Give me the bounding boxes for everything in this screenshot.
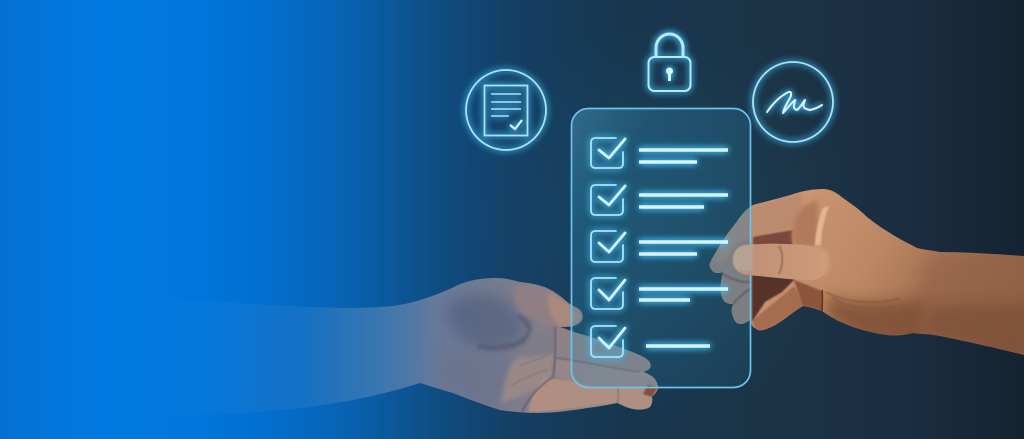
right thumb over the card (733, 244, 828, 280)
row 4 (591, 278, 728, 309)
right hand: forearm shading (924, 258, 1024, 355)
right hand: index finger (752, 192, 802, 240)
right hand: gaps beneath thumb (752, 274, 795, 322)
glass checklist card (572, 108, 750, 388)
right hand: lower palm shadow (826, 295, 925, 345)
left hand: palm and mound (502, 350, 553, 403)
left hand: ring finger (528, 378, 652, 412)
right hand: fingers seen through glass (710, 206, 752, 326)
row 5 (591, 326, 710, 357)
left hand: creases (522, 327, 555, 412)
icon: document in circle (466, 70, 546, 150)
checklist rows (591, 138, 728, 357)
row 2 (591, 185, 728, 215)
icon: padlock (648, 34, 690, 91)
right hand: little finger (753, 286, 804, 330)
right hand: web of thumb (792, 200, 818, 246)
left hand: heel under the thumb (446, 294, 524, 348)
right hand: dark gap beneath index finger (753, 230, 793, 246)
left hand (222, 278, 658, 414)
row 3 (591, 231, 728, 262)
right hand: palm fold (794, 280, 822, 311)
left hand: thumb (515, 284, 583, 327)
icon: signature in circle (753, 62, 833, 142)
right hand (705, 189, 1024, 360)
left hand: middle finger (556, 358, 657, 388)
left hand: index finger (566, 329, 650, 372)
card halo (440, 0, 880, 439)
row 1 (591, 138, 728, 168)
